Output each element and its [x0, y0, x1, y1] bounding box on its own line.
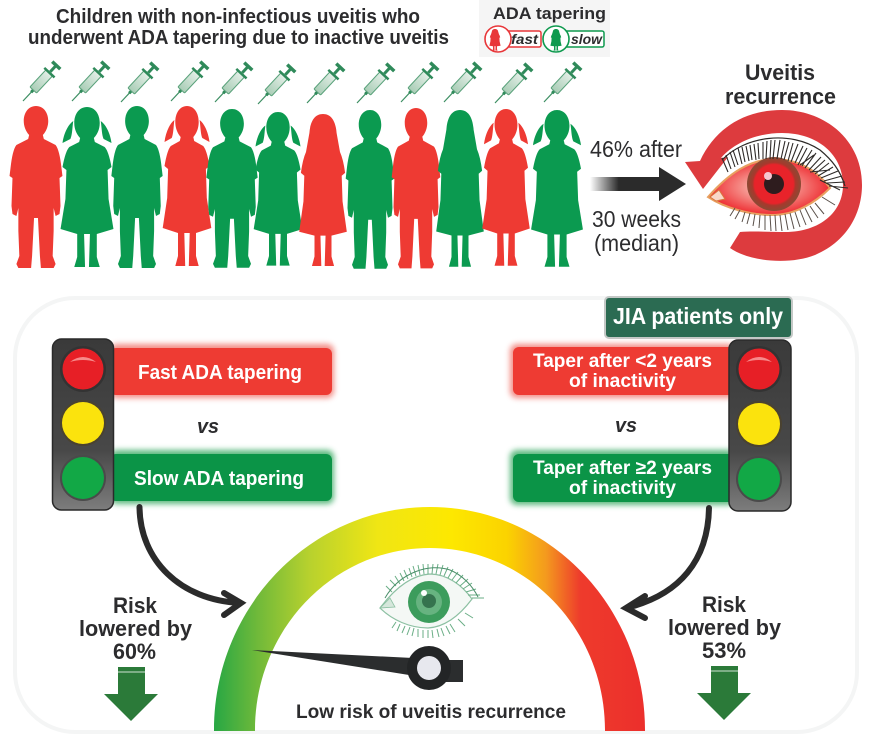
eyeball: [708, 159, 830, 215]
legend item: slow: slow: [571, 31, 603, 47]
legend item: fast: fast: [511, 31, 539, 47]
red bar: Fast ADA tapering: Fast ADA tapering: [138, 362, 302, 384]
gauge needle: [252, 646, 463, 690]
green bar: Taper after ≥2 years: Taper after ≥2 years: [533, 458, 712, 479]
legend: ADA tapering: [479, 0, 610, 57]
green bar: Taper after ≥2 years: [510, 450, 735, 505]
red bar: Taper after <2 years: of inactivity: [569, 371, 676, 392]
eyelashes: [722, 140, 848, 190]
text: 30 weeks (median): [592, 206, 681, 256]
arrow: left curve to gauge: [140, 507, 241, 615]
traffic light: left: [52, 339, 114, 510]
text: risk lowered by 53%: Risk: [702, 592, 747, 617]
red bar: Taper after <2 years: [510, 344, 735, 398]
vs label: left: vs: [197, 416, 219, 438]
heading: Uveitis recurrence: Uveitis: [745, 60, 815, 85]
text: risk lowered by 60%: Risk: [113, 593, 158, 618]
text: risk lowered by 53%: 53%: [702, 638, 746, 663]
red bar: Fast ADA tapering: [110, 344, 334, 398]
icon: red eye with circular arrow: [685, 110, 862, 261]
red bar: Taper after <2 years: Taper after <2 years: [533, 351, 712, 372]
sign: JIA patients only: JIA patients only: [613, 303, 783, 329]
arrow: down right: [697, 666, 751, 720]
circular arrow: [685, 110, 862, 261]
icons: syringes: [18, 59, 584, 109]
text: 30 weeks (median): (median): [594, 230, 679, 256]
icon: green eye: [380, 564, 484, 638]
panel: comparisons: [15, 298, 857, 732]
green bar: Slow ADA tapering: [110, 450, 334, 504]
heading: Uveitis recurrence: [725, 60, 836, 109]
gauge arc: [214, 507, 645, 731]
text: risk lowered by 60%: 60%: [113, 639, 156, 664]
text: risk lowered by 53%: lowered by: [668, 615, 782, 640]
gauge caption: Low risk of uveitis recurrence: [296, 702, 566, 723]
title: [28, 6, 449, 49]
children silhouettes row: [10, 106, 583, 269]
arrow: down left: [104, 667, 158, 721]
vs label: right: vs: [615, 415, 637, 437]
text: 30 weeks (median): 30 weeks: [592, 206, 681, 232]
heading: Uveitis recurrence: recurrence: [725, 84, 836, 109]
legend: ADA tapering: ADA tapering: [493, 4, 606, 23]
title: underwent ADA tapering due to inactive uveitis: [28, 27, 449, 49]
arrow: to recurrence: [590, 167, 686, 201]
sign: JIA patients only: [605, 297, 792, 338]
traffic light: right: [729, 340, 791, 511]
text: risk lowered by 60%: lowered by: [79, 616, 193, 641]
green bar: Taper after ≥2 years: of inactivity: [569, 478, 676, 499]
arrow: right curve to gauge: [626, 508, 709, 618]
text: risk lowered by 60%: [79, 593, 193, 664]
green bar: Slow ADA tapering: Slow ADA tapering: [134, 468, 304, 490]
text: 46% after: 46% after: [590, 136, 682, 162]
text: risk lowered by 53%: [668, 592, 782, 663]
title: Children with non-infectious uveitis who: [56, 6, 420, 28]
